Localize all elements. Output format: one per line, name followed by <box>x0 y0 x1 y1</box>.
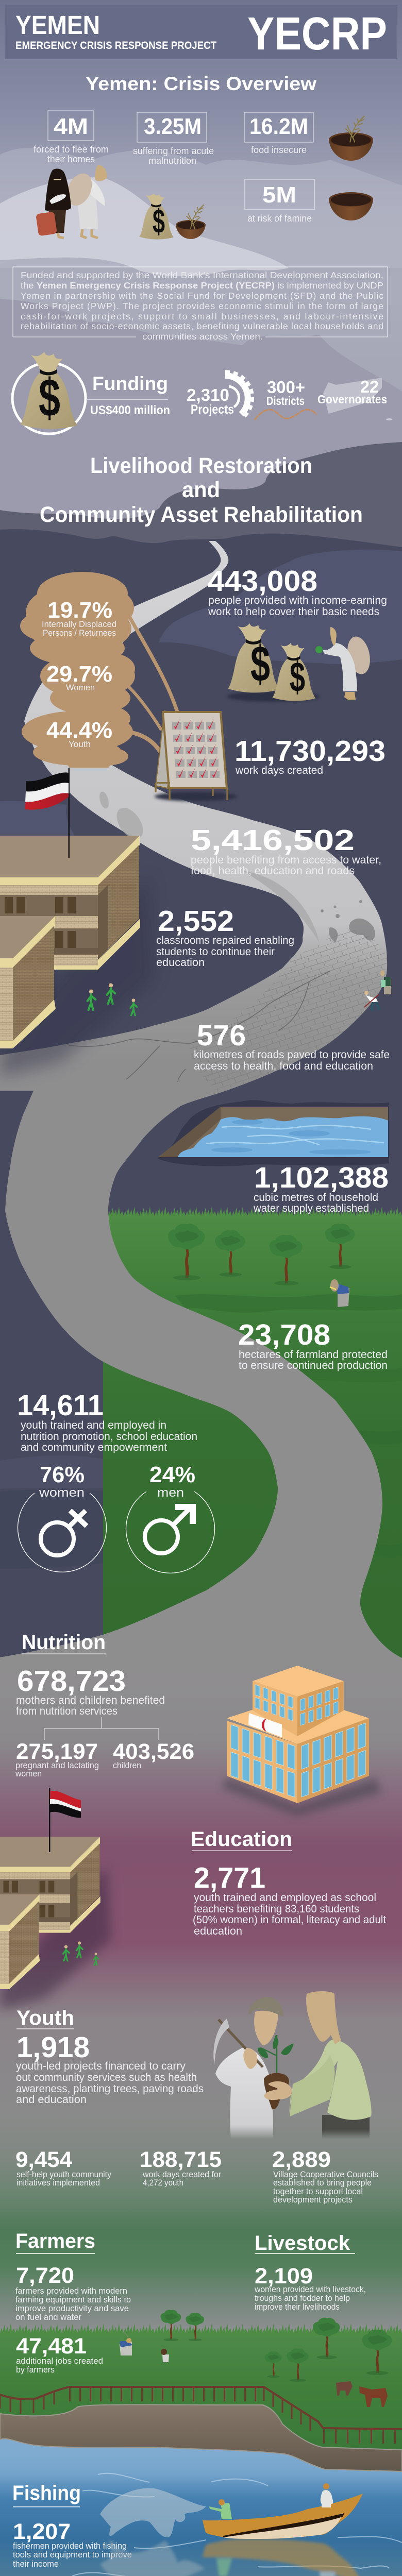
stat: governorates on map: 22 <box>360 377 379 396</box>
icon: female symbol <box>41 1511 87 1555</box>
water <box>0 2437 402 2576</box>
stat: 2,771 teachers: education <box>194 1925 242 1937</box>
project description box: cash-for-work projects, support to small businesses, and labour-intensive <box>21 311 383 321</box>
stat: 2,552 classrooms: education <box>156 957 205 969</box>
funding panel <box>12 352 170 434</box>
seedling and soil <box>258 2035 294 2110</box>
background: lighter ground patches <box>0 550 402 840</box>
heading: crisis overview: Yemen: Crisis Overview <box>86 73 316 94</box>
stat: 3.25M malnutrition: 3.25M <box>144 114 202 139</box>
stat: projects with gear: Projects <box>191 402 234 417</box>
icon: money bag in ring: $ <box>39 368 60 428</box>
illustration: hospital <box>222 1666 381 1816</box>
stat: 2,552 classrooms <box>156 905 294 969</box>
stat: 1,918 projects: and education <box>16 2094 87 2106</box>
stat: 14,611 youth: 14,611 <box>17 1389 104 1422</box>
flag on school <box>25 768 70 858</box>
stat: projects with gear: 2,310 <box>187 385 229 404</box>
stat: 47,481 jobs: 47,481 <box>16 2334 87 2359</box>
stat: 1,207 fishermen <box>13 2519 132 2569</box>
stat: 2,552 classrooms: students to continue their <box>156 946 275 958</box>
stat: 24% men: men <box>157 1486 184 1500</box>
stat: 1,102,388 water <box>253 1161 389 1214</box>
stat: 5,416,502 people: people benefiting from access to water, <box>191 854 381 866</box>
stat: 44.4% youth: Youth <box>69 740 91 749</box>
hospital lower right windows <box>301 1723 365 1797</box>
stat: 9,454 initiatives <box>15 2147 111 2188</box>
stat: 76% women <box>18 1462 107 1572</box>
heading: livelihood restoration: Livelihood Restoration <box>90 453 312 478</box>
stat: 7,720 farmers: 7,720 <box>16 2263 74 2288</box>
stat: 1,207 fishermen: fishermen provided with fishing <box>13 2541 127 2551</box>
cloud shape <box>20 572 135 768</box>
road: dark cracks <box>67 971 330 1082</box>
illustration: fishing net <box>100 2488 206 2537</box>
man with globe <box>315 627 373 700</box>
stat: pregnant and lactating women <box>15 1739 99 1778</box>
stat: 678,723 mothers and children <box>15 1665 194 1778</box>
stat: 2,552 classrooms: classrooms repaired enabling <box>156 935 294 946</box>
stat: 44.4% youth: 44.4% <box>46 718 112 743</box>
stat: 7,720 farmers: improve productivity and save <box>15 2303 129 2313</box>
icon: empty bowl <box>329 192 373 221</box>
background: subtle ground shading behind gender stats <box>0 1455 271 1569</box>
stat: 14,611 youth: and community empowerment <box>21 1442 167 1453</box>
background: dark mountains <box>0 442 402 567</box>
section: livestock: Livestock <box>255 2232 350 2255</box>
stat: 2,109 women <box>254 2264 366 2312</box>
stat: 5M famine risk: 5M <box>262 182 296 208</box>
cliff <box>0 2404 402 2471</box>
project description box: Works Project (PWP). The project provides economic stimuli in the form of large <box>21 301 383 311</box>
stat: 23,708 hectares <box>238 1318 388 1371</box>
stat: 2,889 village councils: together to support local <box>273 2187 363 2196</box>
bracket <box>44 1717 159 1740</box>
stat: 5M famine risk <box>245 179 314 224</box>
hospital upper windows <box>255 1685 293 1721</box>
stat: 11,730,293 work days: 11,730,293 <box>234 735 386 768</box>
stat: 678,723 mothers and children: from nutrition services <box>16 1705 118 1717</box>
stat: 24% men: 24% <box>149 1462 195 1487</box>
stat: 2,889 village councils: 2,889 <box>272 2147 331 2172</box>
section: farmers <box>15 2230 131 2375</box>
project description box: Funded and supported by the World Bank's International Development Association, <box>21 270 383 280</box>
label: funding: Funding <box>92 373 168 394</box>
stat: pregnant and lactating women: 275,197 <box>16 1739 98 1764</box>
stat: 2,771 teachers: 2,771 <box>194 1861 265 1894</box>
stat: 3.25M malnutrition: malnutrition <box>148 156 196 166</box>
workers on the road <box>364 970 391 1011</box>
stat: 2,109 women: improve their livelihoods <box>255 2302 340 2312</box>
stat: 188,715 work days <box>140 2147 222 2188</box>
stat: 1,102,388 water: 1,102,388 <box>254 1161 389 1194</box>
stat: 5,416,502 people: food, health, education and roads <box>191 865 355 877</box>
stat: 1,207 fishermen: tools and equipment to improve <box>13 2550 132 2560</box>
stat: pregnant and lactating women: pregnant and lactating <box>15 1760 99 1770</box>
stat: 2,109 women: troughs and fodder to help <box>255 2293 350 2303</box>
cows <box>336 2381 388 2407</box>
stat: 2,889 village councils <box>272 2147 378 2205</box>
header band <box>5 5 397 60</box>
project description box: communities across Yemen. <box>142 331 263 342</box>
background: bright cloud <box>0 177 289 276</box>
stat: 576 km roads: access to health, food and education <box>194 1060 373 1072</box>
stat: 14,611 youth: nutrition promotion, school education <box>21 1431 197 1443</box>
stat: 4M displaced: forced to flee from <box>34 144 109 155</box>
flag of Yemen <box>49 1788 81 1852</box>
stat: 2,771 teachers: youth trained and employed as school <box>194 1892 376 1904</box>
stat: 9,454 initiatives: self-help youth community <box>16 2170 111 2179</box>
stat: 576 km roads: kilometres of roads paved to provide safe <box>194 1049 390 1061</box>
road: potholes <box>321 900 375 943</box>
section: youth <box>16 2007 204 2106</box>
right person <box>289 1991 372 2139</box>
stat: children: 403,526 <box>113 1739 194 1764</box>
beneficiary cloud <box>20 572 178 768</box>
stat: 2,889 village councils: development projects <box>273 2195 353 2205</box>
standing man <box>321 2483 333 2507</box>
illustration: two people with seedling <box>213 1991 372 2139</box>
hull <box>203 2494 363 2539</box>
illustration: school building <box>0 836 155 1077</box>
illustration: farmland trees and farmer <box>168 1224 355 1307</box>
illustration: boat and fishermen reflection <box>100 2539 363 2576</box>
illustration: displaced woman and man <box>36 165 107 238</box>
stat: projects with gear <box>187 372 253 417</box>
stat: 19.7% IDPs: Internally Displaced <box>42 620 116 629</box>
stat: 576 km roads: 576 <box>197 1019 246 1052</box>
stat: 3.25M malnutrition: suffering from acute <box>133 146 214 156</box>
grassland <box>0 2324 402 2458</box>
stat: 1,918 projects <box>16 2031 204 2106</box>
stat: 7,720 farmers <box>15 2263 131 2322</box>
stat: 188,715 work days: work days created for <box>142 2170 221 2179</box>
stat: 1,207 fishermen: their income <box>13 2559 59 2569</box>
heading: livelihood restoration <box>40 453 363 527</box>
background: nutrition to farmers gradient <box>0 1590 402 2336</box>
stat: 24% men <box>126 1462 214 1573</box>
illustration: money bags and man <box>227 623 373 702</box>
stat: 443,008 people: work to help cover their basic needs <box>208 606 379 618</box>
heading: nutrition: Nutrition <box>22 1631 106 1654</box>
stat: 1,102,388 water: water supply established <box>253 1202 369 1214</box>
stat: 9,454 initiatives: initiatives implemented <box>16 2178 100 2188</box>
background: grey mid hills <box>0 299 402 567</box>
stat: 5,416,502 people: 5,416,502 <box>191 824 355 857</box>
stat: 1,918 projects: 1,918 <box>16 2031 90 2064</box>
heading: livelihood restoration: and <box>182 478 220 502</box>
illustration: second school <box>0 1837 111 2009</box>
students <box>88 983 137 1015</box>
farmer bending <box>330 1279 349 1307</box>
road: cracked paving <box>190 930 387 1091</box>
section: fishing: Fishing <box>12 2482 81 2504</box>
stat: 188,715 work days: 4,272 youth <box>143 2178 183 2188</box>
stat: 576 km roads <box>194 1019 390 1072</box>
water ripples <box>72 2473 402 2576</box>
students <box>63 1941 98 1965</box>
stat: 1,918 projects: youth-led projects financed to carry <box>16 2060 186 2072</box>
illustration: trees on grassland <box>160 2310 392 2382</box>
project description box: rehabilitation of socio-economic assets, benefiting vulnerable local households and <box>21 321 383 331</box>
stat: 443,008 people <box>208 565 387 618</box>
farmland <box>103 1207 402 1660</box>
illustration: money bags and man: $ <box>290 654 305 701</box>
stat: 7,720 farmers: farmers provided with modern <box>15 2286 127 2296</box>
fisherman with net <box>209 2499 232 2519</box>
project description box <box>13 267 388 342</box>
stat: 16.2M food insecure: food insecure <box>251 145 307 155</box>
stat: 23,708 hectares: to ensure continued production <box>239 1360 388 1371</box>
stat: 678,723 mothers and children: 678,723 <box>17 1665 126 1698</box>
stat: 23,708 hectares: 23,708 <box>238 1318 330 1351</box>
stat: 29.7% women: 29.7% <box>46 662 112 687</box>
stat: 678,723 mothers and children: mothers and children benefited <box>16 1694 165 1706</box>
stat: 1,918 projects: awareness, planting trees, paving roads <box>16 2083 204 2095</box>
stat: 3.25M malnutrition <box>133 112 214 166</box>
section: education: Education <box>191 1828 292 1851</box>
section: fishing <box>12 2482 132 2569</box>
stat: districts <box>255 378 316 420</box>
section: livestock <box>254 2232 366 2312</box>
stat: 7,720 farmers: on fuel and water <box>15 2312 81 2322</box>
label: amount: US$400 million <box>90 403 170 417</box>
section: education <box>191 1828 386 1937</box>
stat: 2,889 village councils: Village Cooperative Councils <box>273 2170 378 2179</box>
background: navy ground <box>0 529 402 1700</box>
hospital lower left windows <box>231 1725 295 1797</box>
illustration: water reservoir <box>157 1100 389 1166</box>
stat: 47,481 jobs: additional jobs created <box>16 2356 103 2366</box>
stat: districts: 300+ <box>267 378 305 397</box>
stat: 4M displaced: 4M <box>54 114 88 139</box>
stat: 14,611 youth: youth trained and employed in <box>21 1419 166 1431</box>
water below cliff <box>0 2439 402 2471</box>
icon: bowl with dying plant <box>329 116 373 161</box>
hospital upper block <box>253 1681 297 1736</box>
illustration: boat with fishermen <box>203 2483 363 2539</box>
stat: 29.7% women: Women <box>66 683 95 692</box>
subtitle: EMERGENCY CRISIS RESPONSE PROJECT <box>15 40 216 52</box>
illustration: money bag and bowl <box>139 193 206 240</box>
stat: 2,109 women: women provided with livestock, <box>254 2284 366 2294</box>
section: youth: Youth <box>16 2007 74 2029</box>
background: upper sky <box>0 0 402 567</box>
stat: 1,918 projects: out community services such as health <box>16 2072 197 2083</box>
stat: 76% women: women <box>39 1486 85 1500</box>
fence <box>0 2387 402 2436</box>
check mark grid <box>172 719 220 778</box>
stat: 23,708 hectares: hectares of farmland protected <box>239 1349 388 1361</box>
stat: 5M famine risk: at risk of famine <box>247 213 312 224</box>
stat: 47,481 jobs: by farmers <box>16 2365 55 2375</box>
stat: 2,109 women: 2,109 <box>255 2264 313 2289</box>
stat: 1,207 fishermen: 1,207 <box>13 2519 71 2544</box>
stat: 11,730,293 work days: work days created <box>235 765 323 776</box>
illustration: money bag and bowl: $ <box>153 202 165 240</box>
stat: 19.7% IDPs <box>42 598 116 638</box>
stat: 7,720 farmers: farming equipment and skills to <box>15 2295 131 2304</box>
stat: 2,771 teachers: (50% women) in formal, literacy and adult <box>193 1914 386 1926</box>
stat: pregnant and lactating women: women <box>15 1769 42 1778</box>
stat: 14,611 youth <box>17 1389 197 1453</box>
stat: 4M displaced <box>34 111 109 164</box>
stat: 443,008 people: 443,008 <box>208 565 317 598</box>
illustration: work days sign board <box>155 711 237 801</box>
scythe <box>213 2019 263 2067</box>
stat: 2,889 village councils: established to bring people <box>273 2178 372 2188</box>
icon: male symbol <box>145 1504 196 1553</box>
cloud connectors <box>123 616 178 751</box>
stat: 4M displaced: their homes <box>47 154 95 164</box>
icon: money bag in ring <box>12 352 86 434</box>
background: pale cloud band <box>0 148 402 268</box>
stat: 2,771 teachers: teachers benefiting 83,160 students <box>194 1903 359 1915</box>
stat: 2,552 classrooms: 2,552 <box>158 905 234 938</box>
water ripples <box>206 1126 384 1145</box>
stat: 188,715 work days: 188,715 <box>140 2147 222 2172</box>
stat: 19.7% IDPs: Persons / Returnees <box>43 629 116 638</box>
road <box>0 541 402 1700</box>
red crescent banner <box>248 1713 282 1737</box>
road: worn patches <box>98 791 320 943</box>
stat: districts: Districts <box>266 394 305 408</box>
stat: 1,102,388 water: cubic metres of household <box>254 1192 378 1204</box>
stat: 76% women: 76% <box>40 1462 85 1487</box>
farmers in field <box>120 2333 169 2362</box>
stat: 19.7% IDPs: 19.7% <box>47 598 112 623</box>
stat: governorates on map: Governorates <box>317 393 387 406</box>
title: YEMEN: YEMEN <box>15 10 100 40</box>
stat: 9,454 initiatives: 9,454 <box>15 2147 72 2172</box>
stat: governorates on map <box>317 377 392 420</box>
stat: 47,481 jobs <box>16 2334 103 2375</box>
stat: children: children <box>113 1760 141 1770</box>
project description box: the Yemen Emergency Crisis Response Project (YECRP) is implemented by UNDP <box>21 280 383 291</box>
section: farmers: Farmers <box>15 2230 95 2252</box>
project description box: Yemen in partnership with the Social Fund for Development (SFD) and the Public <box>21 291 383 301</box>
stat: 5,416,502 people <box>191 824 381 877</box>
stat: 16.2M food insecure: 16.2M <box>249 114 308 139</box>
stat: 2,771 teachers <box>193 1861 386 1937</box>
heading: livelihood restoration: Community Asset Rehabilitation <box>40 502 363 527</box>
illustration: money bags and man: $ <box>250 635 270 692</box>
left person <box>213 1997 283 2139</box>
stat: 443,008 people: people provided with income-earning <box>208 595 387 606</box>
stat: 16.2M food insecure <box>244 112 313 155</box>
